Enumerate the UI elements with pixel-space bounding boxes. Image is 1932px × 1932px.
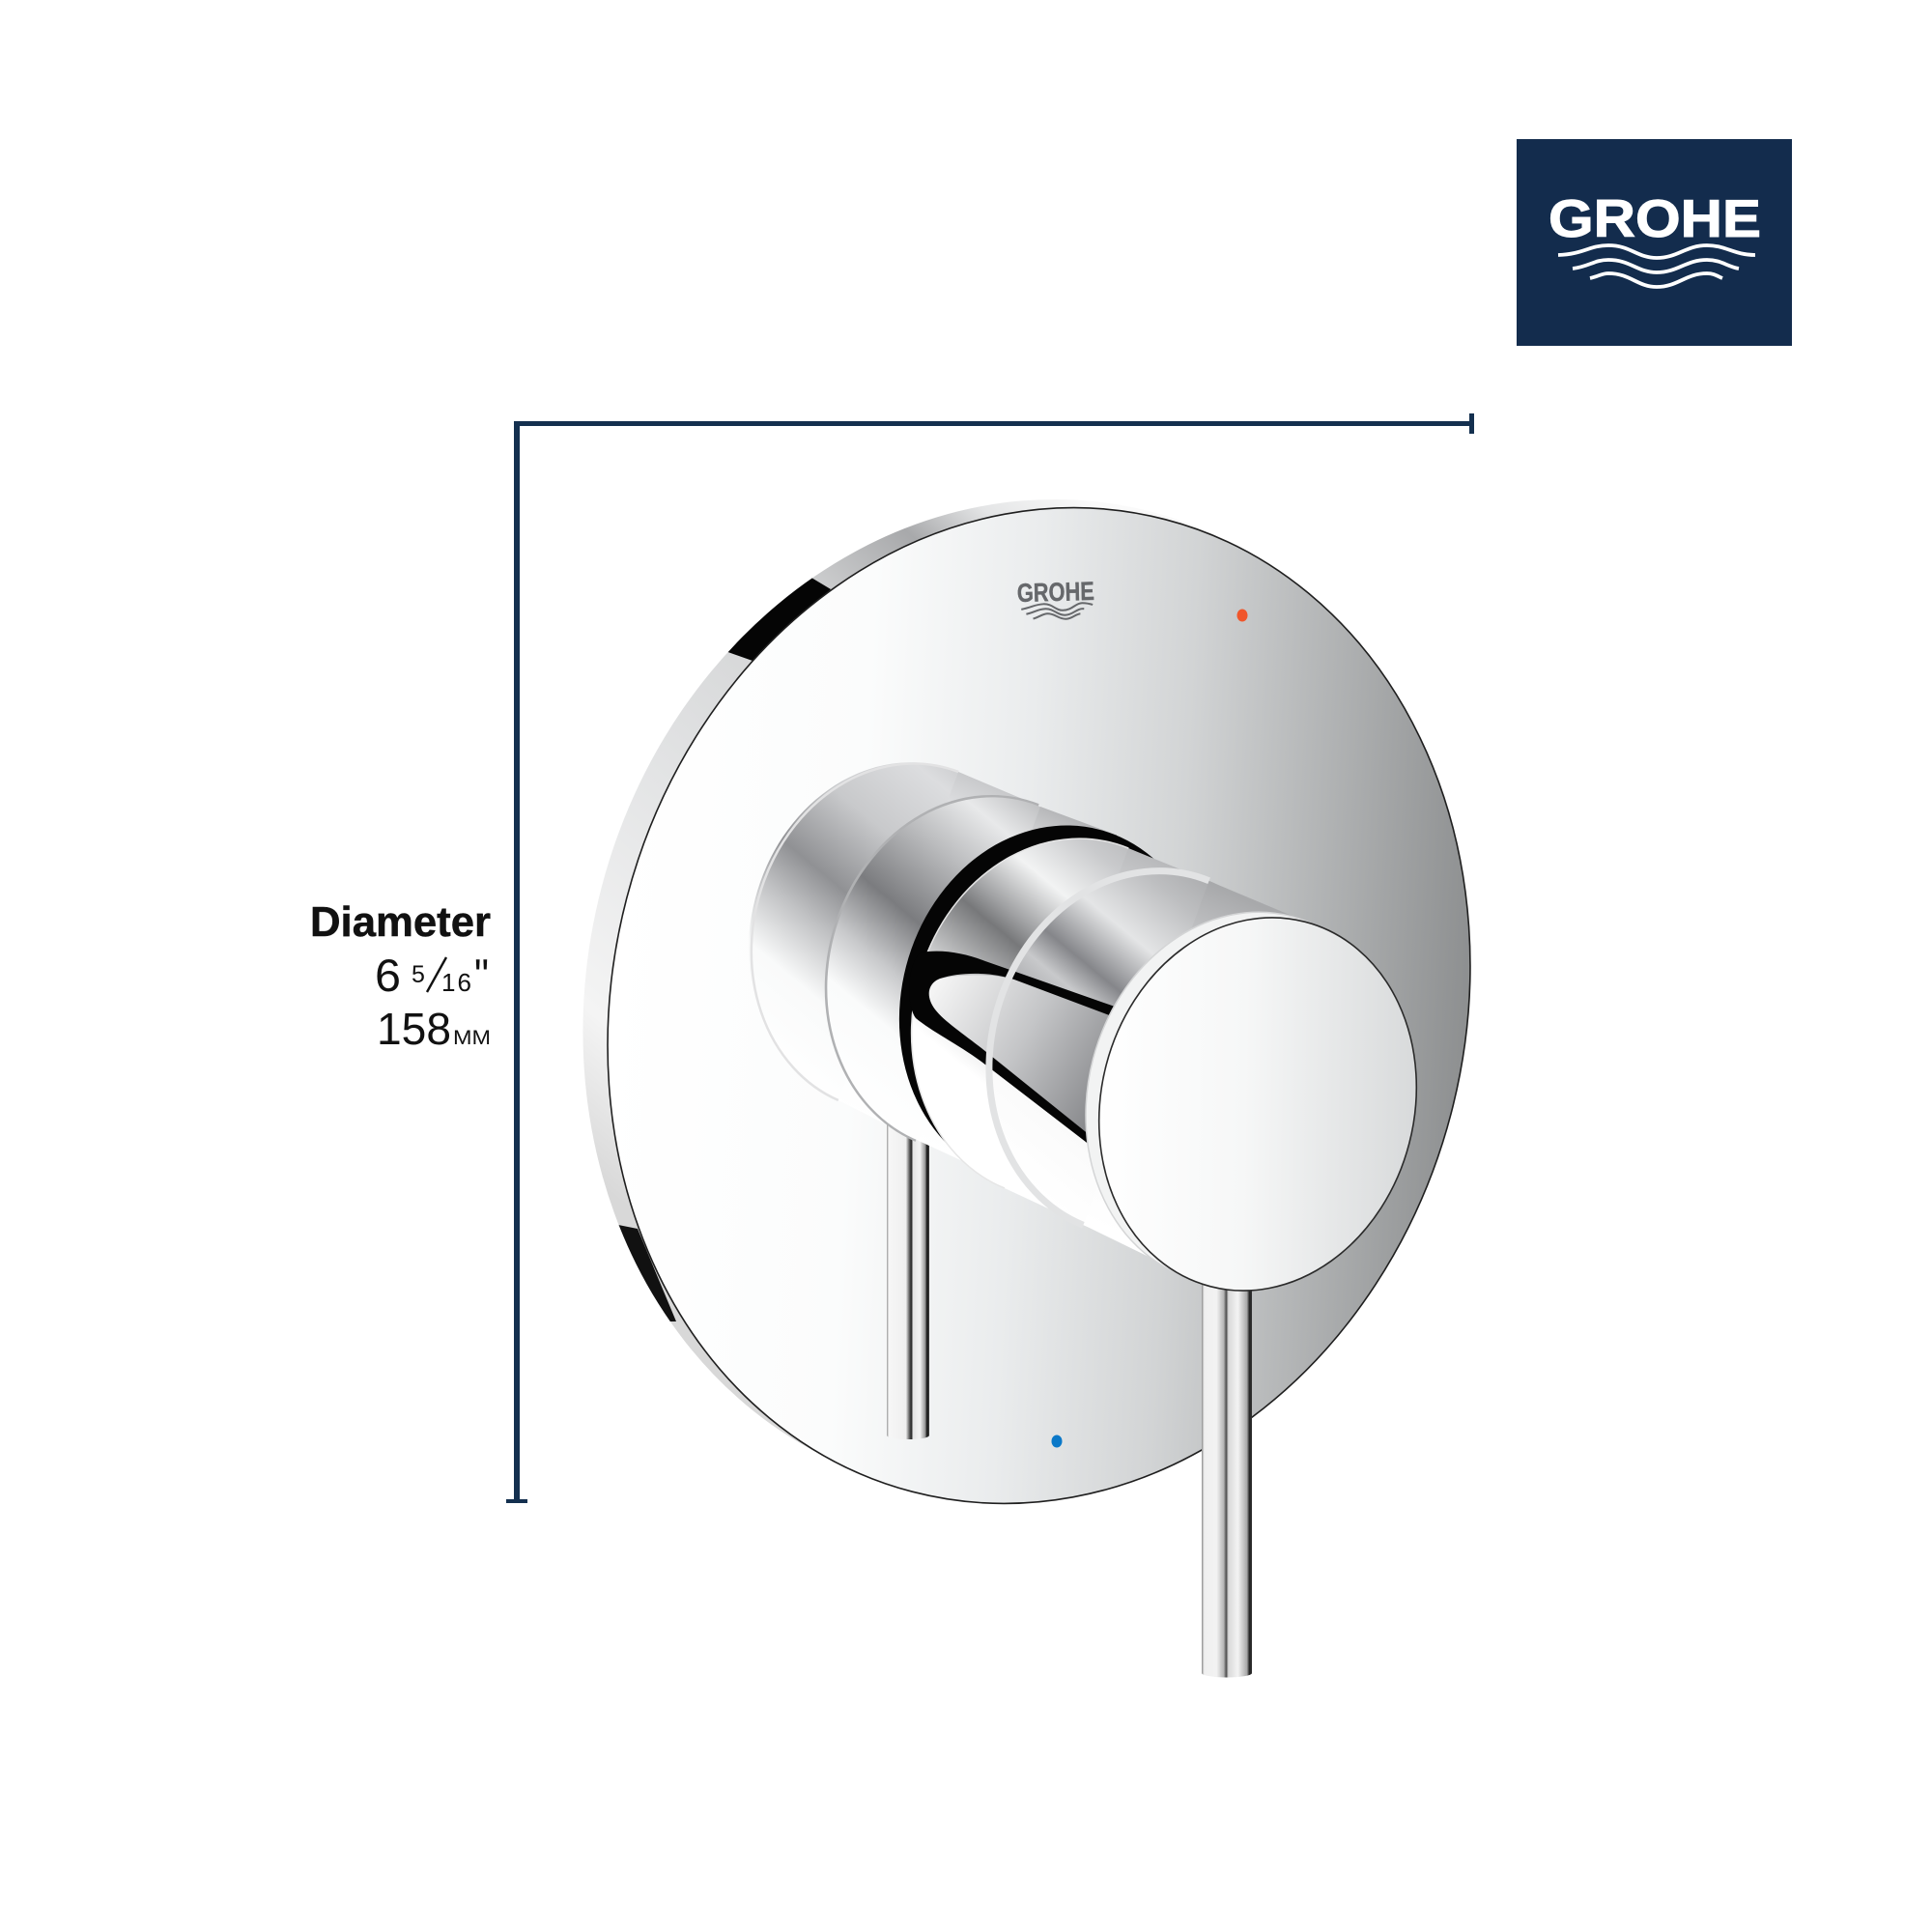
GROHE logo badge: GROHE [1548, 188, 1761, 248]
diameter label: " [474, 950, 489, 1001]
fourth cylinder section [950, 837, 1343, 1272]
GROHE logo badge [1517, 139, 1792, 346]
light ring line [951, 837, 1209, 1234]
diameter label: 6 [375, 950, 401, 1001]
diameter label: 16 [441, 968, 471, 997]
black reflection bands [909, 952, 1120, 1149]
diameter label: Diameter [310, 898, 491, 946]
knob front face [1059, 882, 1457, 1326]
plate engraved GROHE logo: GROHE [1016, 577, 1094, 608]
diameter label [310, 898, 491, 1054]
chrome reflection teardrop [929, 975, 1120, 1139]
diameter label: MM [453, 1027, 491, 1049]
black groove [861, 791, 1247, 1218]
plate engraved GROHE logo [1016, 577, 1095, 620]
cold indicator dot [1051, 1435, 1063, 1447]
cylindrical valve handle [711, 729, 1457, 1326]
diameter label: 5 [412, 961, 425, 988]
rear cylinder section [711, 729, 1086, 1143]
third cylinder section [872, 805, 1261, 1232]
second cylinder section [789, 763, 1170, 1184]
hot indicator dot [1236, 609, 1248, 622]
round trim plate [583, 499, 1471, 1505]
main lever handle [1202, 1275, 1252, 1677]
lever reflection on plate [887, 1101, 929, 1439]
face chamfer [1045, 877, 1443, 1320]
dimension bracket [506, 413, 1474, 1503]
diameter label: 158 [377, 1004, 451, 1054]
